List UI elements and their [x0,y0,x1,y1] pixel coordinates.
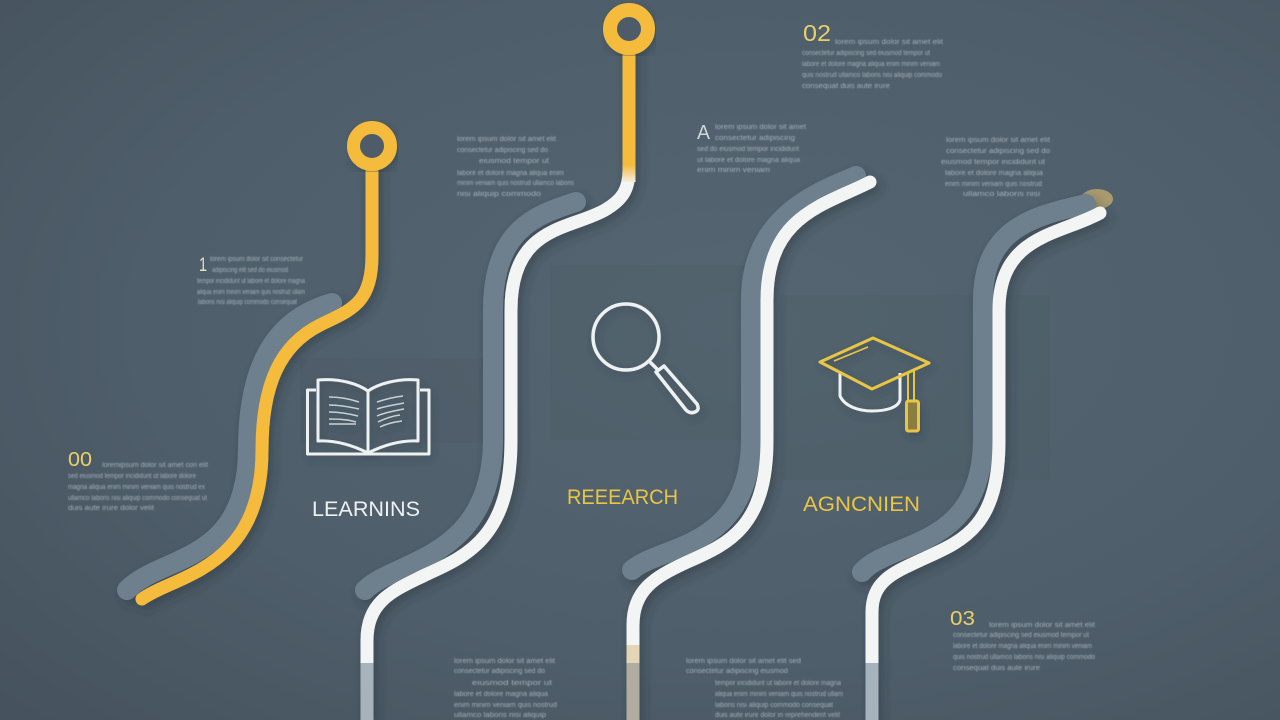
track 2 white ribbon [367,170,629,720]
text block: 1: laboris nisi aliquip commodo consequat [198,299,297,306]
heading: research label: REEEARCH [567,486,678,509]
text block: 03 [953,622,1095,672]
track 1 yellow ribbon [142,165,372,599]
text block: A: enim minim veniam [697,167,770,174]
text block: 00 [68,462,208,512]
text block: 02: labore et dolore magna aliqua enim minim veniam [802,61,940,68]
text block: A: sed do eiusmod tempor incididunt [697,146,799,153]
text block: bottom right: duis aute irure dolor in reprehenderit velit [715,712,840,719]
track 4: tan cap [1081,189,1113,209]
text block: 02: consequat duis aute irure [802,83,890,90]
text block: bottom right: tempor incididunt ut labore et dolore magna [715,680,841,687]
text block: bottom centre: lorem ipsum dolor sit amet elit [454,658,555,665]
text block: 00: loremipsum dolor sit amet con elit [102,462,208,469]
track 2 grey ribbon [365,202,576,590]
text block: 1 [197,256,305,306]
track 1: learning path [127,165,372,599]
track 3 grey ribbon [632,176,856,570]
text block: upper centre: nisi aliquip commodo [457,191,541,198]
number 02: 02 [803,20,831,46]
track 4: fourth path [862,204,1100,720]
text block: 1: tempor incididunt ut labore et dolore magna [197,278,305,285]
number 00: 00 [68,449,92,471]
text block: 00: sed eiusmod tempor incididunt ut labore dolore [68,473,196,480]
track 2: second path [365,45,629,720]
text block: A: consectetur adipiscing [715,135,795,142]
text block: A: lorem ipsum dolor sit amet [715,124,806,131]
text block: upper right: ullamco laboris nisi [963,191,1041,198]
text block: A: ut labore et dolore magna aliqua [697,157,800,164]
text block: upper right: labore et dolore magna aliqua [945,170,1043,177]
text block: bottom right: lorem ipsum dolor sit amet elit sed [686,658,801,665]
text block: upper right: eiusmod tempor incididunt ut [941,159,1045,166]
track 3: third path [632,176,870,720]
text block: bottom right: consectetur adipiscing eiusmod [686,668,788,675]
icon: yellow ring marker 1 [354,128,390,164]
text block: 03: consectetur adipiscing sed eiusmod tempor ut [953,632,1089,639]
text block: 00: magna aliqua enim minim veniam quis nostrud ex [68,484,205,491]
text block: bottom centre: eiusmod tempor ut [472,680,552,687]
heading: achievement label: AGNCNIEN [803,493,920,516]
text block: 00: duis aute irure dolor velit [68,505,154,512]
text block: 03: labore et dolore magna aliqua enim minim veniam [953,643,1092,650]
text block: upper right [941,137,1050,198]
text block: 03: consequat duis aute irure [953,665,1040,672]
icon: yellow ring marker 2 [610,10,648,48]
icon: graduation cap [820,338,929,431]
track 3 white ribbon [633,182,870,720]
text block: upper centre [457,136,574,198]
text block: 03: lorem ipsum dolor sit amet elit [989,622,1095,629]
text block: 1: adipiscing elit sed do eiusmod [212,267,288,274]
text block: upper centre: minim veniam quis nostrud ullamco laboris [457,180,574,187]
text block: upper right: consectetur adipiscing sed do [946,148,1050,155]
text block: upper right: lorem ipsum dolor sit amet elit [946,137,1050,144]
track 4 white ribbon [872,213,1100,720]
track base fades [360,645,878,720]
letter A: A [697,122,711,144]
text block: upper centre: labore et dolore magna aliqua enim [457,170,564,177]
text block: bottom centre: labore et dolore magna aliqua [454,691,548,698]
text block: upper centre: lorem ipsum dolor sit amet elit [457,136,556,143]
text block: 02: lorem ipsum dolor sit amet elit [835,39,943,46]
text block: bottom right [686,658,843,719]
text block: bottom centre: consectetur adipiscing sed do [454,668,545,675]
track 4 grey ribbon [862,204,1086,572]
text block: bottom right: laboris nisi aliquip commodo consequat [715,702,833,709]
text block: 1: aliqua enim minim veniam quis nostrud ullam [197,289,305,296]
text block: 03: quis nostrud ullamco laboris nisi aliquip commodo [953,654,1095,661]
number 03: 03 [950,608,975,630]
text block: bottom centre: enim minim veniam quis nostrud [454,702,557,709]
text block: 1: lorem ipsum dolor sit consectetur [210,256,304,263]
text block: upper centre: consectetur adipiscing sed do [457,147,548,154]
text block: 02: quis nostrud ullamco laboris nisi aliquip commodo [802,72,942,79]
text block: bottom centre [454,658,557,719]
text block: 00: ullamco laboris nisi aliquip commodo consequat ut [68,495,207,502]
text block: bottom right: aliqua enim minim veniam quis nostrud ullam [715,691,843,698]
text block: upper centre: eiusmod tempor ut [479,158,549,165]
text block: upper right: enim minim veniam quis nostrud [945,181,1042,188]
icon: open book [308,380,429,454]
text block: A [697,124,806,174]
text block: 02: consectetur adipiscing sed eiusmod tempor ut [802,50,930,57]
track 1 grey ribbon [127,303,332,590]
icon: magnifying glass [593,304,698,413]
track 2 yellow stem [622,45,636,182]
heading: learning label: LEARNINS [312,498,420,521]
text block: 02 [802,39,943,90]
text block: bottom centre: ullamco laboris nisi aliquip [454,712,546,719]
number 1: 1 [199,255,207,276]
